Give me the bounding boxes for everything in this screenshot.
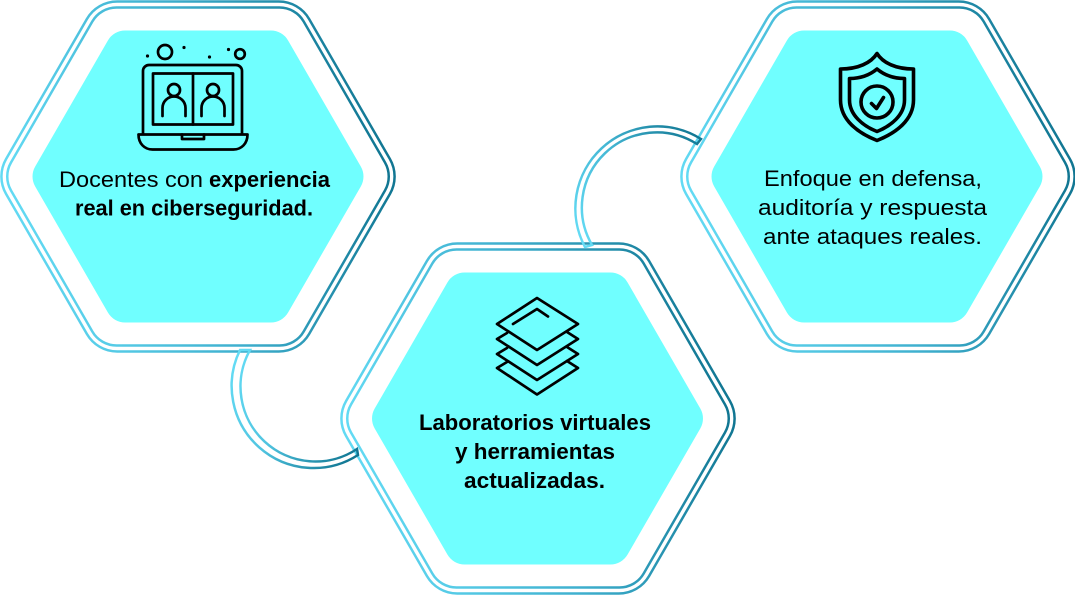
panel: laboratorios bbox=[341, 244, 735, 594]
icon: stacked layers bbox=[497, 298, 578, 394]
text: docentes: Docentes con bbox=[59, 167, 203, 192]
arrow: connector docentes to laboratorios bbox=[232, 350, 358, 468]
hexagon frame: enfoque bbox=[681, 2, 1075, 352]
icon: shield with check bbox=[840, 54, 914, 140]
text: laboratorios: y herramientas bbox=[455, 439, 615, 464]
hexagon frame: docentes bbox=[1, 2, 395, 352]
text: enfoque: auditoría y respuesta bbox=[758, 195, 988, 220]
icon: laptop with two people bbox=[138, 45, 248, 150]
text: enfoque: Enfoque en defensa, bbox=[764, 166, 982, 191]
text: enfoque: ante ataques reales. bbox=[763, 224, 982, 249]
arrow: connector laboratorios to enfoque bbox=[575, 126, 701, 247]
panel: docentes bbox=[1, 2, 395, 352]
panel: enfoque bbox=[681, 2, 1075, 352]
text: laboratorios: Laboratorios virtuales bbox=[419, 410, 651, 435]
hexagon frame: laboratorios bbox=[341, 244, 735, 594]
text: docentes: experiencia bbox=[209, 167, 330, 192]
text: laboratorios: actualizadas. bbox=[464, 468, 605, 493]
text: docentes: real en ciberseguridad. bbox=[75, 196, 313, 220]
